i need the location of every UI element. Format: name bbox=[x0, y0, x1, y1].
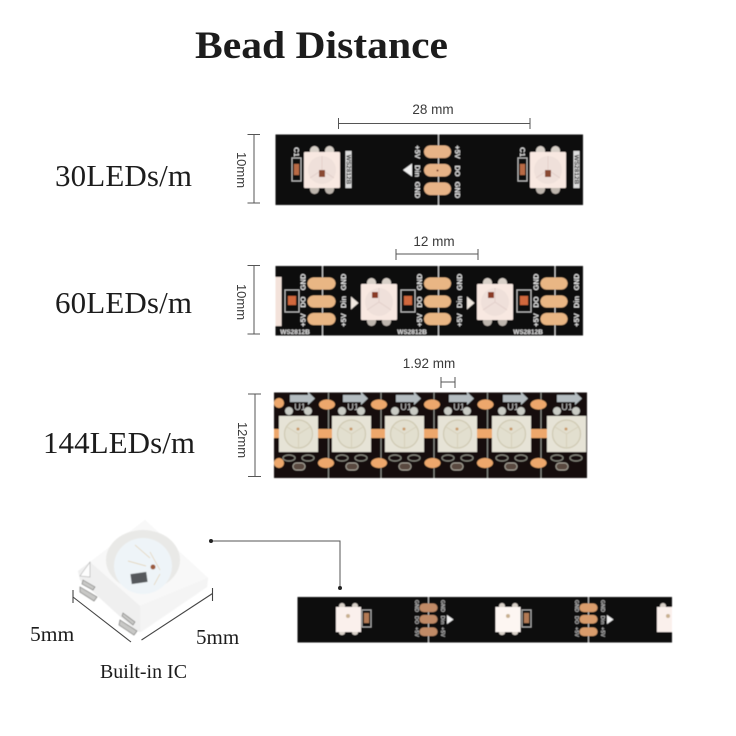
strip: 144 LEDs per metre: U1 bbox=[347, 402, 359, 412]
strip: 30 LEDs per metre: Din bbox=[413, 165, 422, 177]
dimension: 12 mm bbox=[396, 234, 478, 260]
strip: 144 LEDs per metre: U1 bbox=[294, 402, 306, 412]
strip: 60 LEDs per metre: Din bbox=[339, 296, 348, 308]
strip: 60 LEDs per metre: GND bbox=[415, 273, 424, 290]
strip: 60 LEDs per metre: GND bbox=[298, 273, 308, 290]
dimension: 10mm strip 2: 10mm bbox=[234, 284, 249, 320]
strip: 30 LEDs per metre: GND bbox=[413, 182, 422, 199]
strip: 60 LEDs per metre: DO bbox=[298, 296, 308, 308]
dimension: 10mm strip 2 bbox=[234, 266, 260, 334]
strip: close-up LED strip: DO bbox=[413, 616, 419, 625]
strip: close-up LED strip: Din bbox=[599, 616, 605, 625]
strip: close-up LED strip: +5V bbox=[413, 627, 419, 637]
strip: 60 LEDs per metre: DO bbox=[532, 296, 540, 308]
icon: SMD 5050 LED package bbox=[78, 520, 208, 635]
dimension: 5mm right edge bbox=[142, 588, 212, 640]
label: 144LEDs/m: 144LEDs/m bbox=[43, 425, 195, 460]
dimension: 1.92 mm bbox=[403, 356, 455, 388]
strip: close-up LED strip: GND bbox=[599, 600, 605, 612]
strip: close-up LED strip: +5V bbox=[439, 627, 445, 637]
strip: 60 LEDs per metre: GND bbox=[532, 273, 540, 290]
strip: 60 LEDs per metre: GND bbox=[339, 273, 348, 290]
strip: 60 LEDs per metre: +5V bbox=[298, 313, 308, 327]
label: 5mm left: 5mm bbox=[30, 622, 74, 646]
strip: close-up LED strip: GND bbox=[413, 600, 419, 612]
strip: close-up LED strip: DO bbox=[573, 616, 579, 625]
strip: 60 LEDs per metre: +5V bbox=[455, 313, 464, 327]
dimension: 12 mm: 12 mm bbox=[413, 234, 455, 249]
strip: close-up LED strip: Din bbox=[439, 616, 445, 625]
strip: close-up LED strip: GND bbox=[573, 600, 579, 612]
dimension: 12mm strip 3: 12mm bbox=[235, 422, 250, 458]
strip: 30 LEDs per metre: DO bbox=[453, 165, 462, 177]
strip: 144 LEDs per metre: U1 bbox=[507, 402, 519, 412]
strip: 60 LEDs per metre: +5V bbox=[532, 313, 540, 327]
title: Bead Distance bbox=[195, 24, 448, 67]
dimension: 28 mm bbox=[338, 102, 530, 129]
dimension: 10mm strip 1: 10mm bbox=[234, 152, 249, 188]
strip: 60 LEDs per metre: Din bbox=[572, 296, 581, 308]
strip: 30 LEDs per metre: GND bbox=[453, 182, 462, 199]
strip: 30 LEDs per metre: +5V bbox=[453, 145, 462, 159]
strip: 60 LEDs per metre: GND bbox=[572, 273, 581, 290]
strip: 60 LEDs per metre: WS2812B bbox=[513, 329, 543, 336]
strip: 60 LEDs per metre: +5V bbox=[572, 313, 581, 327]
icon: LED solder leads bbox=[80, 580, 137, 635]
strip: close-up LED strip: +5V bbox=[573, 627, 579, 637]
strip: 30 LEDs per metre: C1 bbox=[518, 147, 527, 157]
strip: 30 LEDs per metre: C1 bbox=[292, 147, 301, 157]
strip: 60 LEDs per metre: DO bbox=[415, 296, 424, 308]
strip: 60 LEDs per metre: +5V bbox=[339, 313, 348, 327]
dimension: 1.92 mm: 1.92 mm bbox=[403, 356, 455, 371]
strip: 144 LEDs per metre bbox=[274, 392, 587, 478]
label: 30LEDs/m: 30LEDs/m bbox=[55, 158, 192, 193]
label: 5mm right: 5mm bbox=[196, 625, 239, 649]
strip: 30 LEDs per metre: WS2812B bbox=[344, 155, 352, 185]
strip: 60 LEDs per metre: +5V bbox=[415, 313, 424, 327]
strip: 144 LEDs per metre: U1 bbox=[453, 402, 465, 412]
strip: 60 LEDs per metre: Din bbox=[455, 296, 464, 308]
strip: 144 LEDs per metre: U1 bbox=[400, 402, 412, 412]
strip: 30 LEDs per metre: WS2812B bbox=[572, 155, 580, 185]
strip: 60 LEDs per metre: WS2812B bbox=[397, 329, 427, 336]
strip: 60 LEDs per metre bbox=[276, 266, 583, 336]
dimension: 28 mm: 28 mm bbox=[412, 102, 454, 117]
strip: close-up LED strip: GND bbox=[439, 600, 445, 612]
callout connector bbox=[209, 539, 342, 590]
dimension: 5mm left edge bbox=[73, 590, 131, 642]
strip: 60 LEDs per metre: GND bbox=[455, 273, 464, 290]
strip: 144 LEDs per metre: U1 bbox=[561, 402, 573, 412]
strip: close-up LED strip: +5V bbox=[599, 627, 605, 637]
dimension: 10mm strip 1 bbox=[234, 134, 260, 203]
label: Built-in IC: Built-in IC bbox=[100, 662, 187, 683]
strip: 30 LEDs per metre bbox=[276, 134, 583, 205]
strip: 60 LEDs per metre: WS2812B bbox=[280, 329, 310, 336]
strip: close-up LED strip bbox=[298, 597, 672, 642]
strip: 30 LEDs per metre: +5V bbox=[413, 145, 422, 159]
dimension: 12mm strip 3 bbox=[235, 394, 261, 476]
label: 60LEDs/m: 60LEDs/m bbox=[55, 285, 192, 320]
